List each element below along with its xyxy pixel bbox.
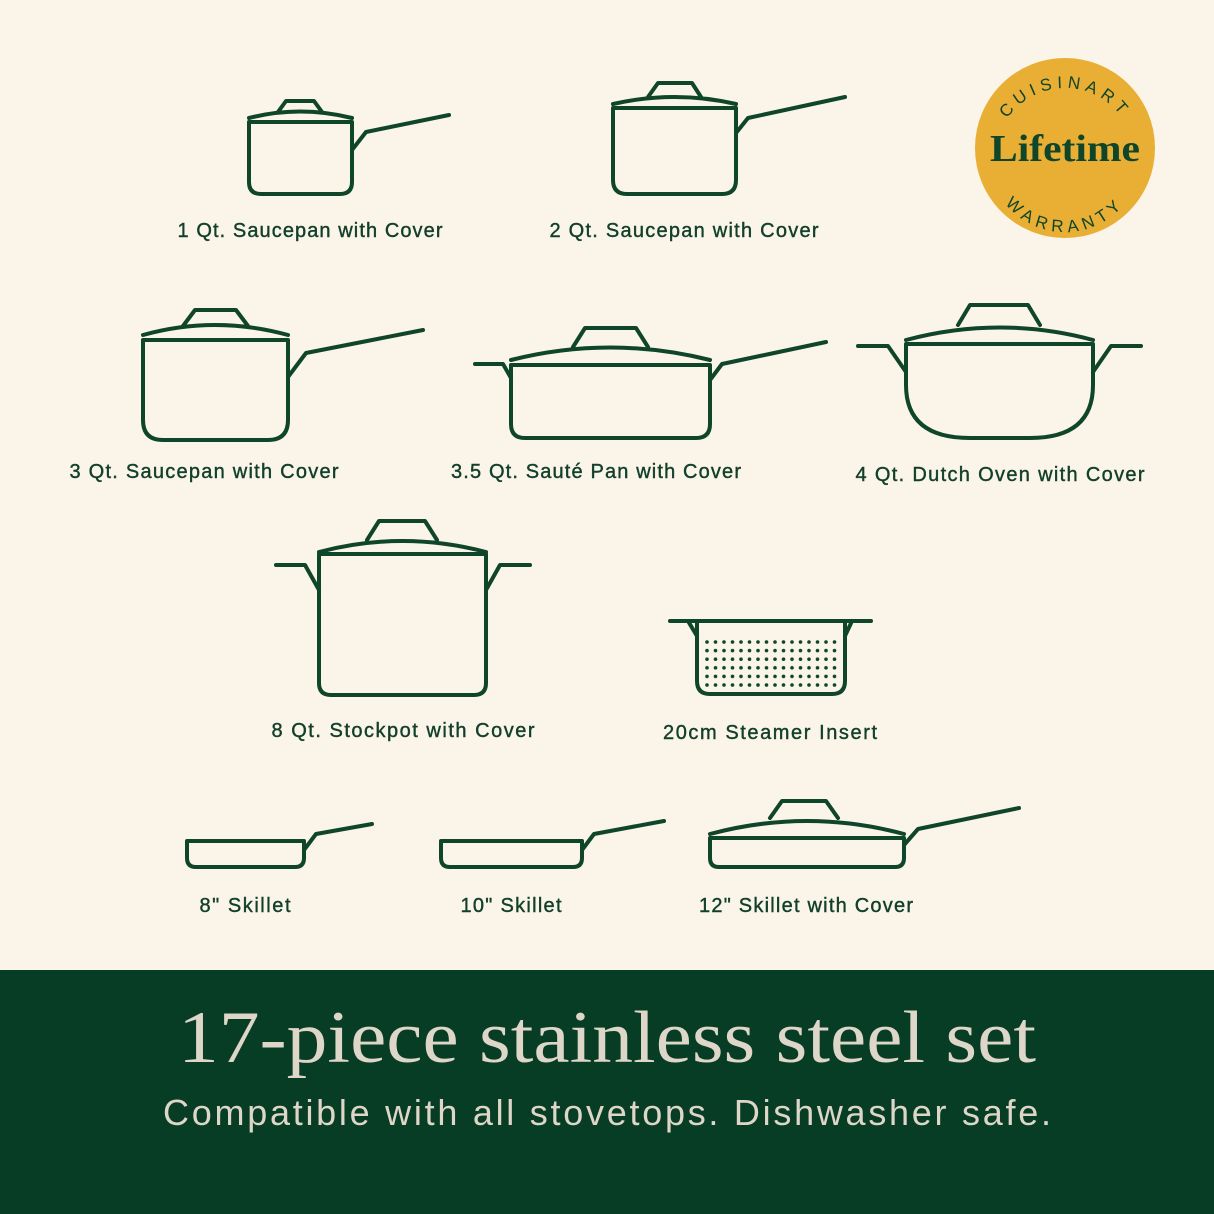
icon: 8 in skillet	[187, 824, 372, 867]
icon: 2 qt saucepan	[613, 83, 845, 194]
badge: lifetime warranty: CUISINART	[1000, 76, 1129, 116]
label: 8 skillet: 8" Skillet	[200, 895, 291, 917]
icon: 3 qt saucepan	[143, 310, 423, 440]
badge: lifetime warranty: WARRANTY	[1007, 196, 1118, 232]
label: steamer: 20cm Steamer Insert	[663, 722, 877, 744]
subtitle: Compatible with all stovetops. Dishwasher safe.	[163, 1092, 1051, 1133]
icon: 1 qt saucepan	[249, 101, 449, 194]
label: dutch oven: 4 Qt. Dutch Oven with Cover	[856, 464, 1145, 486]
icon: 10 in skillet	[441, 821, 664, 867]
badge: lifetime warranty: Lifetime	[990, 128, 1140, 170]
icon: dutch oven	[858, 305, 1141, 438]
icon: steamer insert	[670, 621, 871, 694]
icon: stockpot	[276, 521, 530, 695]
label: saute pan: 3.5 Qt. Sauté Pan with Cover	[451, 461, 741, 483]
label: 2 qt: 2 Qt. Saucepan with Cover	[550, 220, 819, 242]
badge: lifetime warranty	[975, 58, 1155, 238]
label: 3 qt: 3 Qt. Saucepan with Cover	[70, 461, 339, 483]
bottom banner	[0, 970, 1214, 1214]
label: 12 skillet: 12" Skillet with Cover	[699, 895, 913, 917]
icon: saute pan	[475, 328, 826, 438]
label: 1 qt: 1 Qt. Saucepan with Cover	[178, 220, 443, 242]
label: stockpot: 8 Qt. Stockpot with Cover	[272, 720, 535, 742]
title: 17-piece stainless steel set	[178, 997, 1036, 1079]
label: 10 skillet: 10" Skillet	[460, 895, 562, 917]
icon: 12 in skillet with cover	[710, 801, 1019, 867]
